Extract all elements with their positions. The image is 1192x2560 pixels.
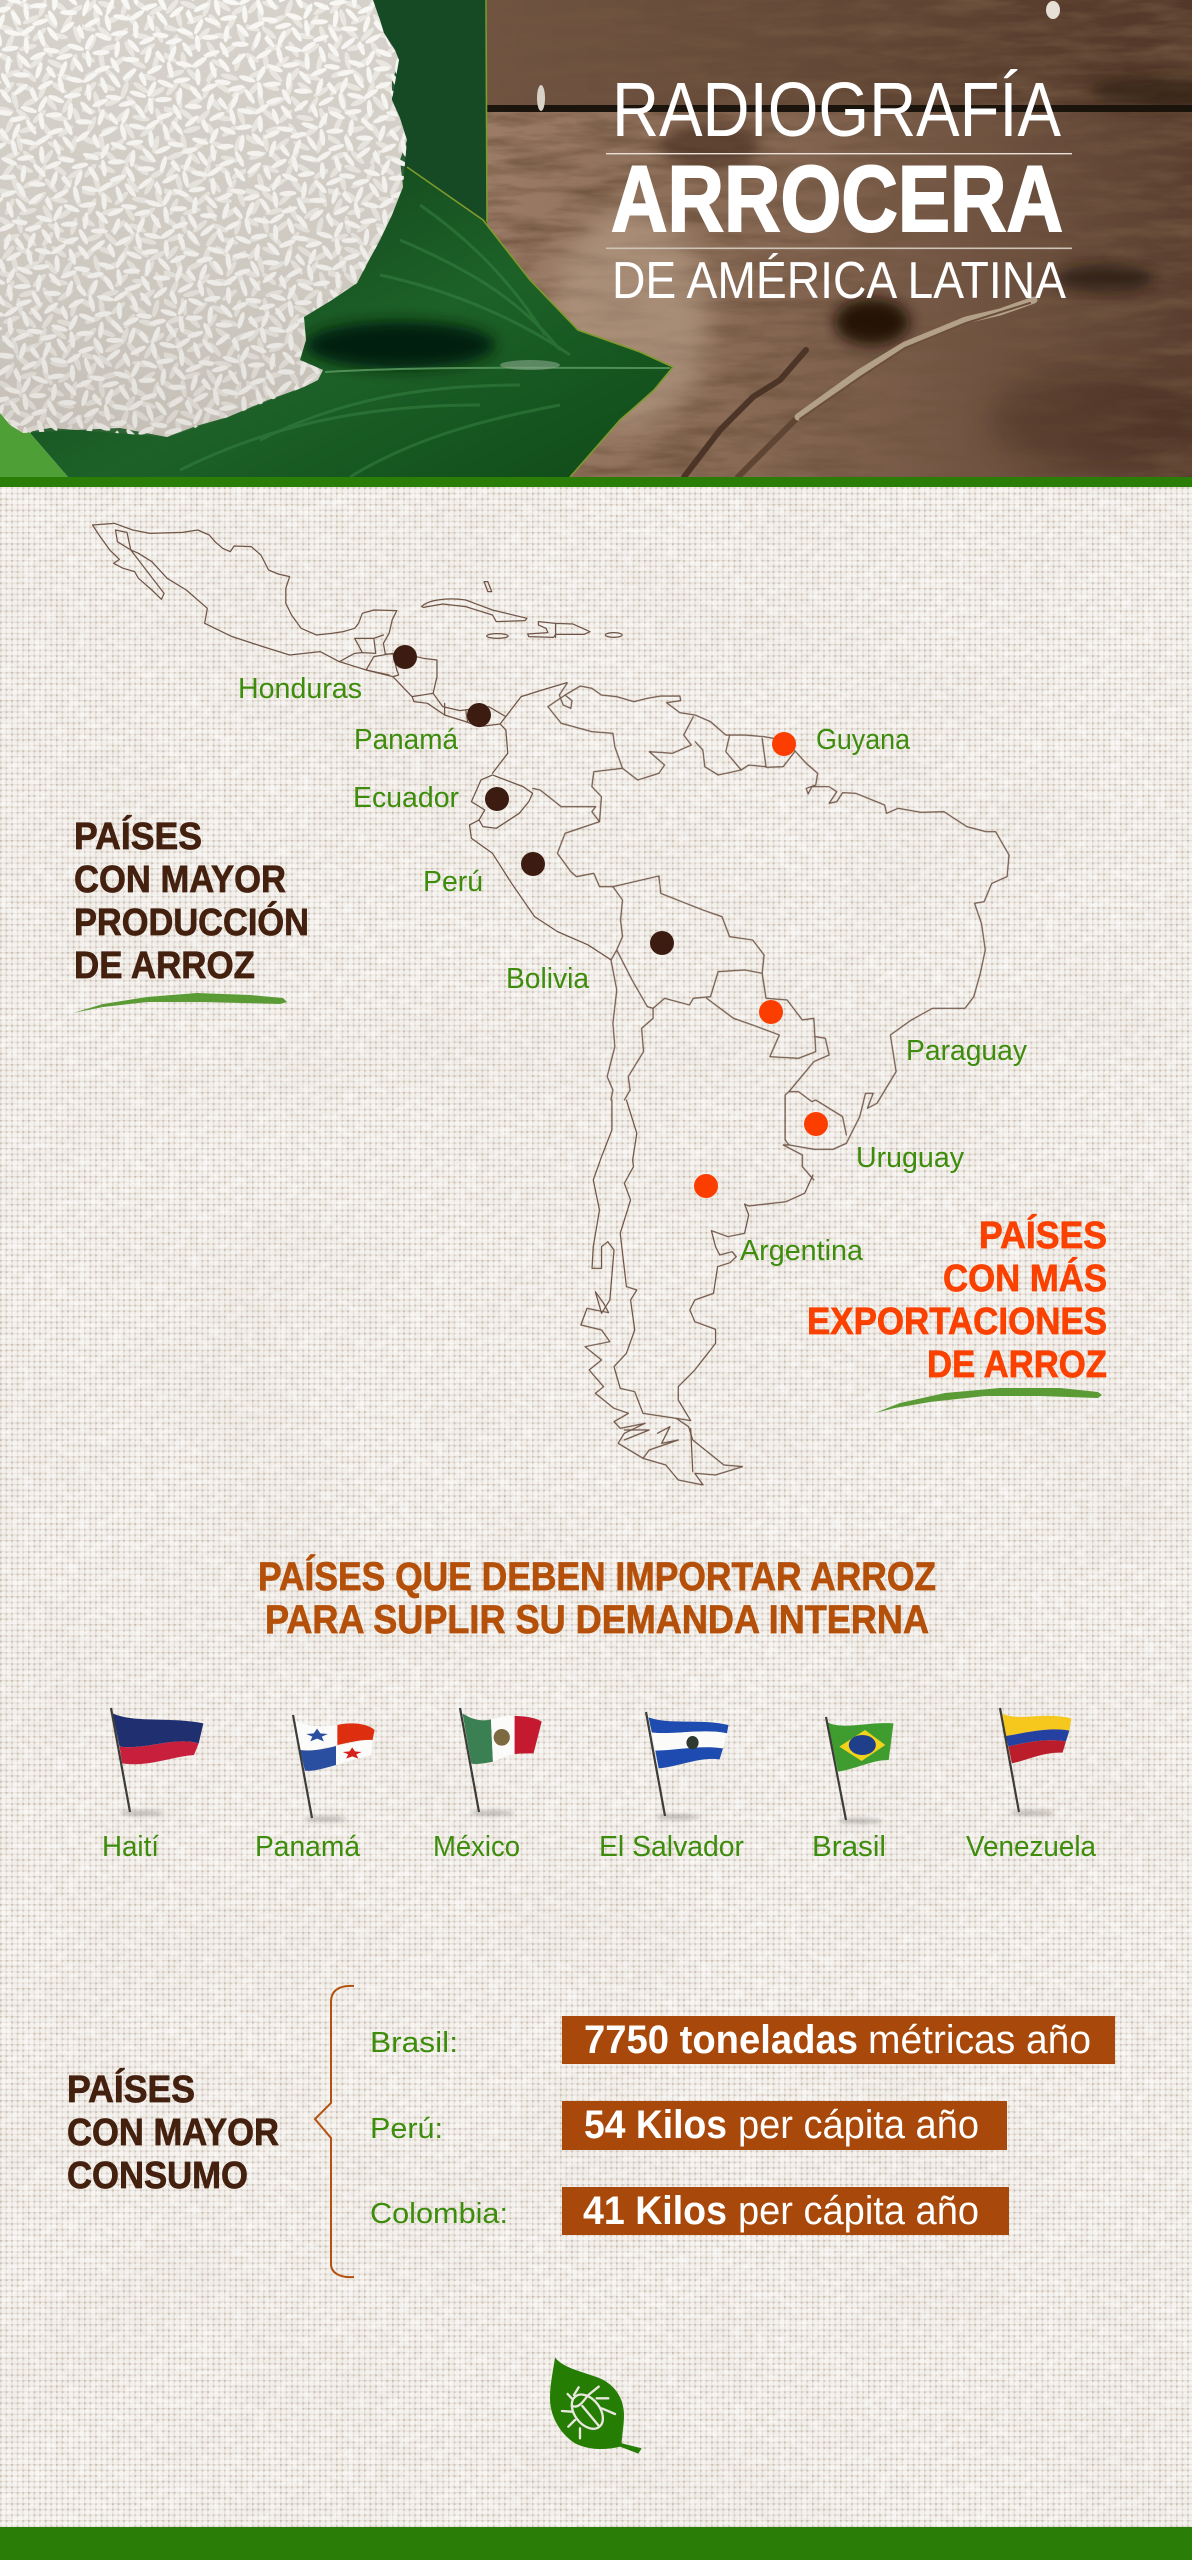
- dots: top production countries: [393, 645, 674, 955]
- consumption row: Brasil: 7750 toneladas: [584, 2018, 858, 2062]
- title line: de América Latina: DE AMÉRICA LATINA: [612, 252, 1066, 310]
- flag: Brasil: Brasil: [812, 1831, 886, 1863]
- wood background: [480, 0, 1192, 477]
- heading: highest consumption: CONSUMO: [67, 2155, 248, 2197]
- consumption row: Perú: Perú:: [370, 2113, 443, 2145]
- heading: top rice production: CON MAYOR: [74, 859, 286, 901]
- flag: México: [433, 1708, 542, 1863]
- icon: leaf with beetle: [550, 2357, 642, 2454]
- heading: top rice exports: PAÍSES: [979, 1213, 1107, 1257]
- consumption row: Colombia: Colombia:: [370, 2198, 508, 2230]
- map country labels: Panamá: [354, 724, 459, 756]
- map country labels: Paraguay: [906, 1035, 1027, 1067]
- map country labels: Ecuador: [353, 782, 459, 814]
- map country labels: Perú: [423, 866, 483, 898]
- heading: top rice exports: EXPORTACIONES: [807, 1301, 1107, 1343]
- rice pile: [0, 0, 407, 437]
- brush stroke under exports heading: [875, 1388, 1102, 1413]
- flag: Venezuela: [966, 1708, 1097, 1863]
- flag: Haití: Haití: [102, 1831, 159, 1863]
- title line: Radiografía: RADIOGRAFÍA: [612, 67, 1062, 153]
- consumption row: Colombia: [370, 2187, 1009, 2235]
- consumption row: Brasil: Brasil:: [370, 2027, 458, 2059]
- map country labels: Honduras: [238, 673, 362, 705]
- heading: top rice production: PRODUCCIÓN: [74, 900, 309, 944]
- flag: Panamá: Panamá: [255, 1831, 361, 1863]
- heading: highest consumption: [67, 2067, 279, 2197]
- heading: highest consumption: CON MAYOR: [67, 2112, 279, 2154]
- heading: top rice exports: DE ARROZ: [927, 1344, 1107, 1386]
- flag: El Salvador: El Salvador: [599, 1831, 744, 1863]
- consumption row: Brasil: métricas año: [868, 2018, 1091, 2062]
- flag: Haití: [102, 1708, 203, 1863]
- heading: countries that must import rice: PARA SUPLIR SU DEMANDA INTERNA: [265, 1598, 929, 1642]
- map: northern and central South America: [533, 683, 1009, 1180]
- map country labels: Guyana: [816, 724, 911, 756]
- title line: Arrocera: ARROCERA: [611, 146, 1063, 251]
- map: southern cone: [581, 1100, 813, 1485]
- heading: countries that must import rice: [258, 1554, 936, 1642]
- heading: top rice production: [74, 814, 309, 987]
- green leaves: [0, 0, 673, 477]
- flag: El Salvador: [599, 1712, 744, 1863]
- map country labels: Uruguay: [856, 1142, 964, 1174]
- consumption row: Perú: per cápita año: [738, 2103, 979, 2147]
- heading: top rice exports: [807, 1213, 1107, 1386]
- consumption row: Colombia: per cápita año: [738, 2189, 979, 2233]
- consumption row: Perú: 54 Kilos: [584, 2103, 727, 2147]
- consumption row: Perú: [370, 2101, 1007, 2150]
- hero photo banner: [0, 0, 1192, 477]
- flag: Venezuela: Venezuela: [966, 1831, 1097, 1863]
- brush stroke under production heading: [73, 993, 287, 1013]
- bottom green band: [0, 2527, 1192, 2560]
- curly brace: [315, 1986, 354, 2277]
- map country labels: Argentina: [740, 1235, 864, 1267]
- flag: México: México: [433, 1831, 520, 1863]
- map country labels: Bolivia: [506, 963, 590, 995]
- heading: top rice production: DE ARROZ: [74, 945, 255, 987]
- consumption row: Colombia: 41 Kilos: [583, 2189, 727, 2233]
- top green band: [0, 477, 1192, 487]
- map of Latin America: [93, 523, 1009, 1485]
- heading: top rice production: PAÍSES: [74, 814, 202, 858]
- twigs: [684, 300, 1034, 477]
- flag: Brasil: [812, 1717, 893, 1863]
- heading: countries that must import rice: PAÍSES QUE DEBEN IMPORTAR ARROZ: [258, 1554, 936, 1599]
- flags row: [102, 1708, 1097, 1863]
- heading: top rice exports: CON MÁS: [943, 1256, 1107, 1300]
- consumption row: Brasil: [370, 2016, 1115, 2064]
- map country labels: [238, 673, 1027, 1267]
- map: Mexico, Central America and the Caribbean: [93, 523, 622, 960]
- flag: Panamá: [255, 1715, 375, 1863]
- title: [606, 67, 1072, 310]
- dots: top export countries: [694, 732, 828, 1198]
- heading: highest consumption: PAÍSES: [67, 2067, 195, 2111]
